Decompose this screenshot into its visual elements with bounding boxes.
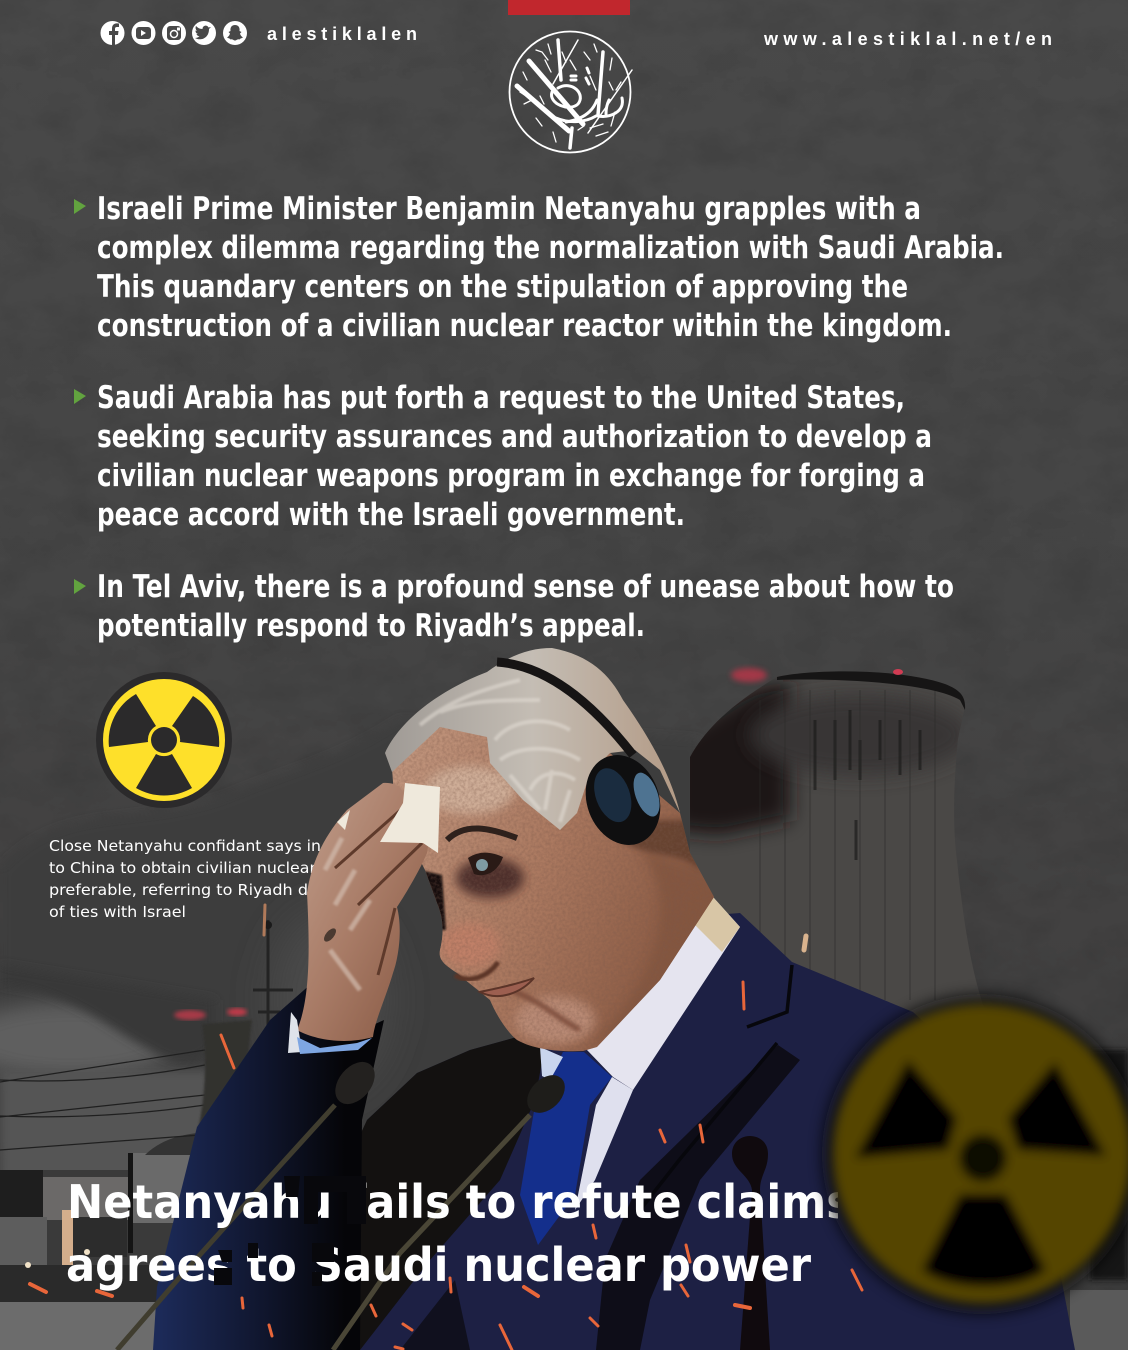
icon: youtube — [132, 21, 156, 45]
background: left cooling tower — [174, 1008, 252, 1135]
bullet marker — [74, 199, 86, 214]
headline: agrees to Saudi nuclear power — [66, 1238, 811, 1292]
icon: instagram — [162, 21, 186, 45]
bullet text: seeking security assurances and authorization to develop a — [97, 419, 932, 455]
text block: first bullet — [74, 191, 1004, 344]
hand shading and knuckles — [335, 806, 422, 975]
hand wiping forehead — [297, 783, 428, 1041]
caption text: to China to obtain civilian nuclear — [49, 859, 317, 877]
icon: blurred radiation symbol — [822, 994, 1128, 1314]
text block: second bullet — [74, 380, 932, 533]
background: smoke and industrial skyline — [0, 720, 1128, 1350]
shirt cuff — [288, 1012, 372, 1054]
icon: twitter — [192, 21, 216, 45]
caption text: of ties with Israel — [49, 903, 186, 921]
headphone earcup — [573, 744, 673, 856]
caption text: preferable, referring to Riyadh d — [49, 881, 308, 899]
background: right cooling tower — [690, 664, 979, 1010]
suit shadow: dark shoulder — [300, 1037, 545, 1350]
bullet marker — [74, 389, 86, 404]
bullet text: Saudi Arabia has put forth a request to the United States, — [97, 380, 905, 416]
nose shadow — [455, 962, 498, 979]
right side ridge — [1090, 1050, 1128, 1280]
factory blocks — [0, 1170, 180, 1300]
suit jacket: torso — [300, 913, 1075, 1350]
website url: www.alestiklal.net/en — [763, 29, 1052, 49]
bullet text — [97, 380, 932, 533]
suit shadow: lower folds — [596, 1045, 800, 1350]
icon: snapchat — [223, 21, 247, 45]
hair highlights — [420, 680, 580, 822]
bullet text — [97, 569, 954, 644]
headline occlusions by the microphone stems — [214, 1176, 366, 1286]
bullet text: In Tel Aviv, there is a profound sense of unease about how to — [97, 569, 954, 605]
headphone band — [497, 662, 633, 755]
glowing sparks — [30, 905, 862, 1350]
bullet text: civilian nuclear weapons program in exchange for forging a — [97, 458, 925, 494]
hair — [385, 648, 680, 830]
left arm sleeve — [153, 983, 384, 1350]
bullet text: peace accord with the Israeli government. — [97, 497, 685, 533]
pylon — [253, 920, 293, 1030]
icon: facebook — [100, 21, 124, 45]
text block: third bullet — [74, 569, 954, 644]
bullet text: Israeli Prime Minister Benjamin Netanyahu grapples with a — [97, 191, 921, 227]
power lines — [0, 1050, 205, 1150]
eye — [468, 853, 503, 875]
warning lights — [731, 668, 767, 682]
mouth — [480, 978, 534, 996]
headline — [66, 1175, 852, 1292]
logo: circular calligraphy emblem — [510, 32, 632, 152]
tissue — [337, 783, 440, 853]
caption text: Close Netanyahu confidant says in — [49, 837, 321, 855]
lapel lines — [640, 965, 792, 1210]
head and neck — [392, 727, 714, 1051]
caption text — [49, 837, 321, 921]
face shading — [392, 728, 714, 1050]
bullet text: construction of a civilian nuclear reactor within the kingdom. — [97, 308, 952, 344]
eyebrow — [447, 828, 517, 840]
top red tab — [508, 0, 630, 15]
bullet text: potentially respond to Riyadh’s appeal. — [97, 608, 645, 644]
tower rim — [777, 671, 965, 710]
social icons row — [100, 21, 247, 45]
shirt collar and front — [587, 897, 740, 1090]
headline: Netanyahu fails to refute claims — [67, 1175, 852, 1229]
bullet marker — [74, 579, 86, 594]
icon: radiation symbol — [96, 672, 232, 808]
bullet text: complex dilemma regarding the normalization with Saudi Arabia. — [97, 230, 1004, 266]
bullet text — [97, 191, 1004, 344]
microphones — [117, 1054, 572, 1350]
necktie — [520, 1052, 612, 1245]
social handle: alestiklalen — [267, 24, 417, 44]
photo illustration: Netanyahu wiping his forehead — [117, 648, 1075, 1350]
bullet text: This quandary centers on the stipulation of approving the — [97, 269, 908, 305]
